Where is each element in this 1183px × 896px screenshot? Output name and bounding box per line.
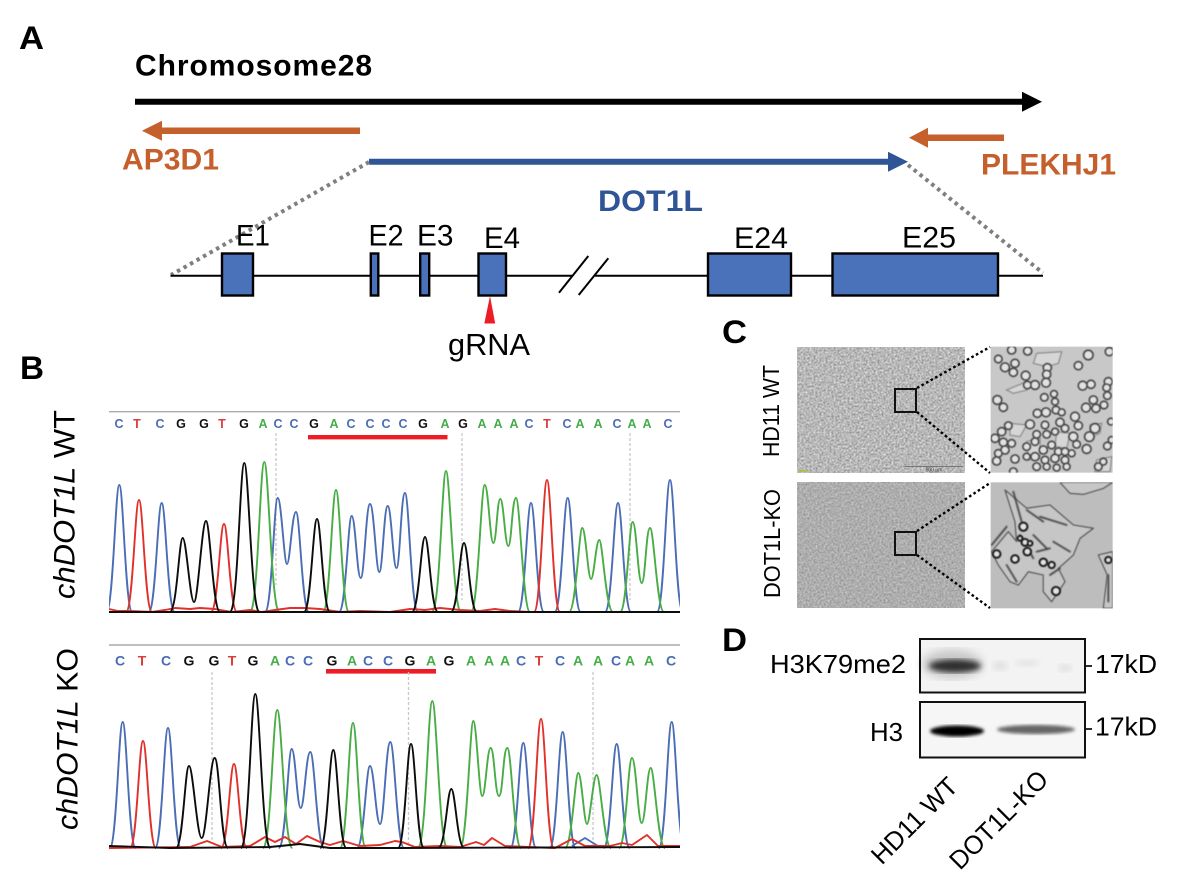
- zoom guide: left dotted line: [171, 162, 369, 275]
- size label: 17kD upper: 17kD: [1095, 649, 1157, 679]
- base calls: WT: T: [543, 417, 551, 431]
- break mark: [559, 256, 608, 295]
- lane label: DOT1L-KO: DOT1L-KO: [943, 764, 1054, 875]
- base calls: WT: A: [593, 417, 603, 431]
- base calls: WT: C: [273, 417, 283, 431]
- panel letter D: D: [722, 622, 747, 658]
- base calls: KO: C: [516, 652, 526, 668]
- exon labels: E1: [236, 220, 270, 253]
- base calls: WT: G: [239, 417, 249, 431]
- base calls: KO: A: [347, 652, 357, 668]
- base calls: KO: G: [184, 652, 195, 668]
- base calls: KO: A: [593, 652, 603, 668]
- label: H3: H3: [870, 717, 903, 747]
- base calls: KO: G: [327, 652, 338, 668]
- base calls: WT: A: [440, 417, 450, 431]
- micrograph: WT zoomed cells: [991, 346, 1115, 475]
- base calls: WT: C: [562, 417, 572, 431]
- exon labels: [236, 220, 956, 255]
- label: gRNA: gRNA: [448, 327, 530, 362]
- arrow: DOT1L: [369, 152, 908, 172]
- base calls: KO: C: [303, 652, 313, 668]
- blot: H3: [920, 702, 1085, 758]
- base calls: KO: A: [500, 652, 510, 668]
- inset box: WT: [895, 389, 916, 412]
- exons: [222, 254, 998, 296]
- base calls: KO: A: [625, 652, 635, 668]
- exon labels: E4: [484, 222, 520, 255]
- arrow: PLEKHJ1: [909, 128, 1004, 148]
- base calls: WT: C: [612, 417, 622, 431]
- size ticks: [1085, 666, 1092, 729]
- base calls: KO: C: [666, 652, 676, 668]
- base calls: KO: G: [405, 652, 416, 668]
- base calls: WT: C: [155, 417, 165, 431]
- base calls: WT: A: [493, 417, 503, 431]
- label: DOT1L-KO: DOT1L-KO: [759, 489, 785, 598]
- base calls: KO: G: [444, 652, 455, 668]
- panel D: western blot: [722, 622, 1157, 875]
- base calls: WT: A: [258, 417, 268, 431]
- chromatogram: WT: [106, 412, 683, 612]
- base calls: WT: C: [365, 417, 375, 431]
- micrograph: WT overview: [797, 347, 965, 474]
- micrograph: KO zoomed cells: [991, 482, 1113, 608]
- panel A: gene structure: [19, 20, 1116, 362]
- base calls: WT: T: [218, 417, 226, 431]
- base calls: WT: A: [477, 417, 487, 431]
- scale bar: 500 μm: [926, 468, 942, 474]
- label: chDOT1L KO: chDOT1L KO: [52, 648, 85, 830]
- base calls: KO: T: [535, 652, 544, 668]
- panel letter A: A: [19, 20, 44, 56]
- lane label: HD11 WT: HD11 WT: [865, 771, 964, 870]
- inset box: KO: [895, 532, 916, 555]
- zoom guide: right dotted line: [908, 165, 1043, 273]
- heading: Chromosome28: Chromosome28: [135, 50, 372, 82]
- base calls: KO: A: [644, 652, 654, 668]
- base calls: WT: A: [329, 417, 339, 431]
- gene line with break: [170, 275, 1043, 277]
- base calls: WT: C: [289, 417, 299, 431]
- red underline: KO target: [326, 669, 436, 674]
- base calls: WT: C: [524, 417, 534, 431]
- label: chDOT1L WT: chDOT1L WT: [48, 410, 82, 599]
- base calls: WT: G: [418, 417, 428, 431]
- base calls: WT: G: [176, 417, 186, 431]
- base calls: KO: A: [573, 652, 583, 668]
- base calls: KO: C: [285, 652, 295, 668]
- base calls: KO: G: [248, 652, 259, 668]
- base calls: WT: A: [509, 417, 519, 431]
- chromatogram: KO: [109, 645, 685, 848]
- base calls: WT: T: [133, 417, 141, 431]
- base calls: KO: C: [115, 652, 125, 668]
- label: H3K79me2: H3K79me2: [770, 649, 906, 679]
- base calls: KO: T: [228, 652, 237, 668]
- dotted zoom lines: [917, 347, 990, 608]
- base calls: WT: C: [663, 417, 673, 431]
- size label: 17kD lower: 17kD: [1095, 712, 1157, 742]
- base calls: KO: G: [209, 652, 220, 668]
- panel C: cell morphology: [722, 314, 1115, 608]
- exon labels: E25: [902, 222, 956, 255]
- base calls: KO: A: [270, 652, 280, 668]
- panel B: sequencing chromatograms: [20, 350, 685, 848]
- traces: WT: [106, 462, 683, 612]
- base calls: KO: C: [555, 652, 565, 668]
- base calls: KO: C: [611, 652, 621, 668]
- base calls: WT: G: [458, 417, 468, 431]
- base calls: WT: C: [114, 417, 124, 431]
- panel letter C: C: [722, 314, 747, 350]
- base calls: WT: G: [309, 417, 319, 431]
- base calls: KO: A: [466, 652, 476, 668]
- micrograph: KO overview: [797, 482, 965, 608]
- base calls: KO: A: [484, 652, 494, 668]
- base calls: WT: C: [398, 417, 408, 431]
- traces: KO: [109, 694, 685, 848]
- red underline: WT target: [308, 435, 448, 439]
- exon labels: E24: [734, 222, 788, 255]
- marker: gRNA red triangle: [484, 296, 495, 324]
- panel letter B: B: [20, 350, 44, 386]
- base calls: KO: C: [363, 652, 373, 668]
- blot: H3K79me2: [920, 639, 1085, 692]
- arrow: AP3D1: [142, 121, 360, 141]
- label: HD11 WT: HD11 WT: [758, 365, 784, 457]
- base calls: WT: A: [627, 417, 637, 431]
- exon labels: E3: [417, 220, 454, 253]
- exon labels: E2: [368, 220, 404, 253]
- label: DOT1L: DOT1L: [598, 185, 703, 218]
- label: AP3D1: AP3D1: [122, 144, 219, 176]
- base calls: WT: A: [642, 417, 652, 431]
- label: PLEKHJ1: PLEKHJ1: [981, 148, 1116, 182]
- base calls: KO: C: [383, 652, 393, 668]
- base calls: WT: G: [199, 417, 209, 431]
- base calls: WT: C: [346, 417, 356, 431]
- base calls: KO: T: [138, 652, 147, 668]
- base calls: KO: C: [161, 652, 171, 668]
- base calls: WT: A: [575, 417, 585, 431]
- base calls: KO: A: [426, 652, 436, 668]
- arrow: chromosome: [135, 92, 1042, 112]
- base calls: WT: C: [381, 417, 391, 431]
